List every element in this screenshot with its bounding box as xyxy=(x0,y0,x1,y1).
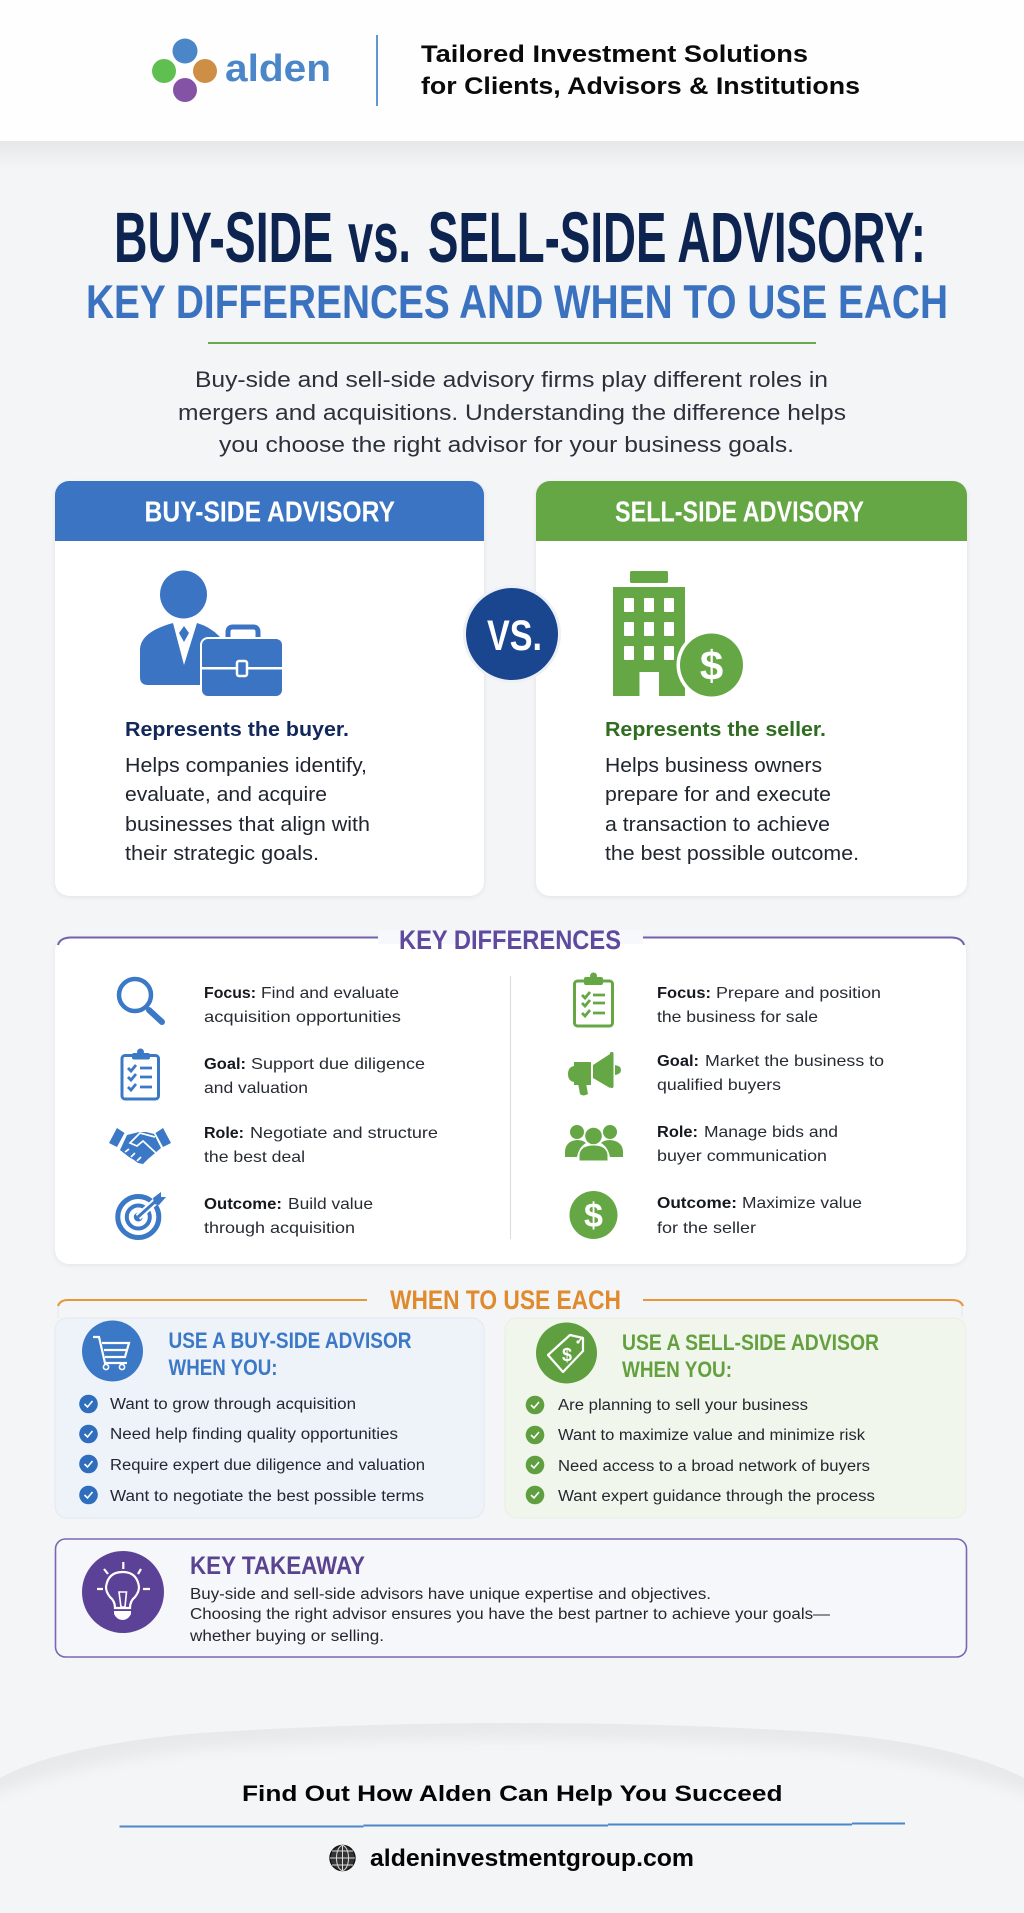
row: sell goal xyxy=(657,1053,884,1094)
sell-side description: Helps business owners xyxy=(605,755,822,777)
buy-side header bar xyxy=(55,481,484,541)
icon: light bulb xyxy=(82,1551,164,1633)
icon: businessperson with briefcase xyxy=(140,570,284,698)
sell advisor checklist: Want to maximize value and minimize risk xyxy=(558,1427,865,1444)
sell-side description: the best possible outcome. xyxy=(605,843,859,865)
buy advisor heading: USE A BUY-SIDE ADVISOR xyxy=(168,1328,412,1353)
row: sell role: buyer communication xyxy=(657,1148,827,1165)
row: sell goal: Goal: xyxy=(657,1053,699,1070)
header tagline xyxy=(421,41,860,100)
row: buy goal: Goal: xyxy=(204,1056,246,1073)
footer xyxy=(0,1723,1024,1872)
footer rule xyxy=(120,1822,905,1828)
panel: buy-side advisory xyxy=(55,481,484,897)
buy advisor heading xyxy=(168,1328,412,1380)
VS badge xyxy=(463,585,561,683)
row: sell role: Manage bids and xyxy=(704,1124,838,1141)
sell-side header bar xyxy=(536,481,967,541)
row: sell goal: Market the business to xyxy=(705,1053,884,1070)
header tagline: for Clients, Advisors & Institutions xyxy=(421,73,860,100)
footer call to action: Find Out How Alden Can Help You Succeed xyxy=(242,1781,782,1806)
buy advisor heading: WHEN YOU: xyxy=(168,1355,278,1380)
footer url: aldeninvestmentgroup.com xyxy=(370,1845,694,1872)
sell advisor heading: USE A SELL-SIDE ADVISOR xyxy=(622,1330,879,1355)
card: use a sell-side advisor xyxy=(505,1318,966,1518)
sell advisor checklist: Need access to a broad network of buyers xyxy=(558,1458,870,1475)
icon: office building with dollar xyxy=(613,571,746,700)
key takeaway text: whether buying or selling. xyxy=(189,1628,384,1645)
panel: when to use each xyxy=(55,1285,966,1518)
buy advisor checklist: Need help finding quality opportunities xyxy=(110,1426,398,1443)
icon: clipboard checklist green xyxy=(574,972,612,1026)
logo: alden xyxy=(152,38,331,102)
row: buy focus: acquisition opportunities xyxy=(204,1009,401,1026)
row: buy outcome: Build value xyxy=(288,1196,373,1213)
row: sell focus xyxy=(657,985,881,1026)
key takeaway text: Choosing the right advisor ensures you have the best partner to achieve your goals— xyxy=(190,1606,831,1623)
key differences heading: KEY DIFFERENCES xyxy=(399,925,621,955)
title xyxy=(114,199,926,278)
title: BUY-SIDE xyxy=(114,199,333,278)
icon: dollar coin xyxy=(570,1191,618,1239)
row: sell focus: Prepare and position xyxy=(716,985,881,1002)
buy-side description: evaluate, and acquire xyxy=(125,784,327,806)
icon: dollar coin: $ xyxy=(584,1197,603,1235)
sell advisor heading: WHEN YOU: xyxy=(622,1357,732,1382)
logo: alden: alden xyxy=(225,48,331,90)
buy-side description: their strategic goals. xyxy=(125,843,319,865)
icon: magnifier xyxy=(119,979,162,1022)
row: sell role: Role: xyxy=(657,1124,698,1141)
row: sell outcome xyxy=(657,1195,862,1237)
header tagline: Tailored Investment Solutions xyxy=(421,41,808,68)
row: buy focus: Focus: xyxy=(204,985,256,1002)
sell-side description: Represents the seller. xyxy=(605,719,826,741)
sell advisor checklist: Are planning to sell your business xyxy=(558,1397,808,1414)
row: sell outcome: Outcome: xyxy=(657,1195,737,1212)
icon: price tag: $ xyxy=(562,1345,572,1365)
intro paragraph xyxy=(178,367,846,457)
sell advisor checklist xyxy=(526,1396,875,1505)
row: sell role xyxy=(657,1124,838,1165)
row: sell goal: qualified buyers xyxy=(657,1077,781,1094)
buy advisor checklist: Want to grow through acquisition xyxy=(110,1396,356,1413)
buy advisor checklist: Want to negotiate the best possible terms xyxy=(110,1488,424,1505)
row: buy goal: and valuation xyxy=(204,1080,308,1097)
header band xyxy=(0,0,1024,169)
row: buy role: the best deal xyxy=(204,1149,305,1166)
buy-side description: Helps companies identify, xyxy=(125,755,367,777)
icon: price tag xyxy=(536,1322,597,1384)
row: sell focus: Focus: xyxy=(657,985,711,1002)
panel: key differences xyxy=(55,925,966,1265)
card: use a buy-side advisor xyxy=(55,1318,484,1518)
buy advisor checklist: Require expert due diligence and valuation xyxy=(110,1457,425,1474)
buy-side description: businesses that align with xyxy=(125,814,370,836)
sell advisor checklist: Want expert guidance through the process xyxy=(558,1488,875,1505)
key takeaway heading: KEY TAKEAWAY xyxy=(190,1552,365,1580)
header divider xyxy=(376,35,378,106)
row: buy role: Negotiate and structure xyxy=(250,1125,438,1142)
icon: shopping cart xyxy=(82,1320,143,1382)
when to use heading: WHEN TO USE EACH xyxy=(390,1285,621,1315)
buy-side header label: BUY-SIDE ADVISORY xyxy=(144,496,395,528)
sell-side description xyxy=(605,719,859,865)
row: sell outcome: for the seller xyxy=(657,1220,757,1237)
row: sell focus: the business for sale xyxy=(657,1009,818,1026)
buy-side description xyxy=(125,719,370,865)
sell-side description: prepare for and execute xyxy=(605,784,831,806)
row: buy role: Role: xyxy=(204,1125,244,1142)
row: buy focus xyxy=(204,985,401,1026)
key takeaway text xyxy=(189,1586,831,1645)
intro paragraph: you choose the right advisor for your business goals. xyxy=(219,432,794,457)
icon: office building with dollar: $ xyxy=(700,642,723,689)
panel: sell-side advisory xyxy=(536,481,967,897)
row: buy focus: Find and evaluate xyxy=(261,985,399,1002)
icon: clipboard checklist blue xyxy=(122,1048,158,1099)
row: buy goal: Support due diligence xyxy=(251,1056,425,1073)
key takeaway text: Buy-side and sell-side advisors have unique expertise and objectives. xyxy=(190,1586,711,1603)
row: buy outcome: through acquisition xyxy=(204,1220,355,1237)
row: buy goal xyxy=(204,1056,425,1097)
row: buy role xyxy=(204,1125,438,1166)
icon: group of people xyxy=(565,1125,623,1161)
buy-side description: Represents the buyer. xyxy=(125,719,349,741)
VS badge: VS. xyxy=(487,612,542,660)
icon: megaphone xyxy=(568,1052,621,1096)
title underline xyxy=(208,342,816,344)
sell-side description: a transaction to achieve xyxy=(605,814,830,836)
panel: key takeaway xyxy=(56,1539,966,1657)
buy advisor checklist xyxy=(79,1395,425,1505)
icon: target with arrow xyxy=(118,1192,166,1238)
row: buy outcome xyxy=(204,1196,373,1237)
row: buy outcome: Outcome: xyxy=(204,1196,282,1213)
intro paragraph: mergers and acquisitions. Understanding the difference helps xyxy=(178,400,846,425)
sell-side header label: SELL-SIDE ADVISORY xyxy=(615,496,864,528)
title: vs. xyxy=(348,199,411,278)
icon: handshake xyxy=(109,1128,171,1164)
sell advisor heading xyxy=(622,1330,879,1382)
intro paragraph: Buy-side and sell-side advisory firms play different roles in xyxy=(195,367,828,392)
row: sell outcome: Maximize value xyxy=(742,1195,862,1212)
icon: globe xyxy=(330,1846,355,1870)
